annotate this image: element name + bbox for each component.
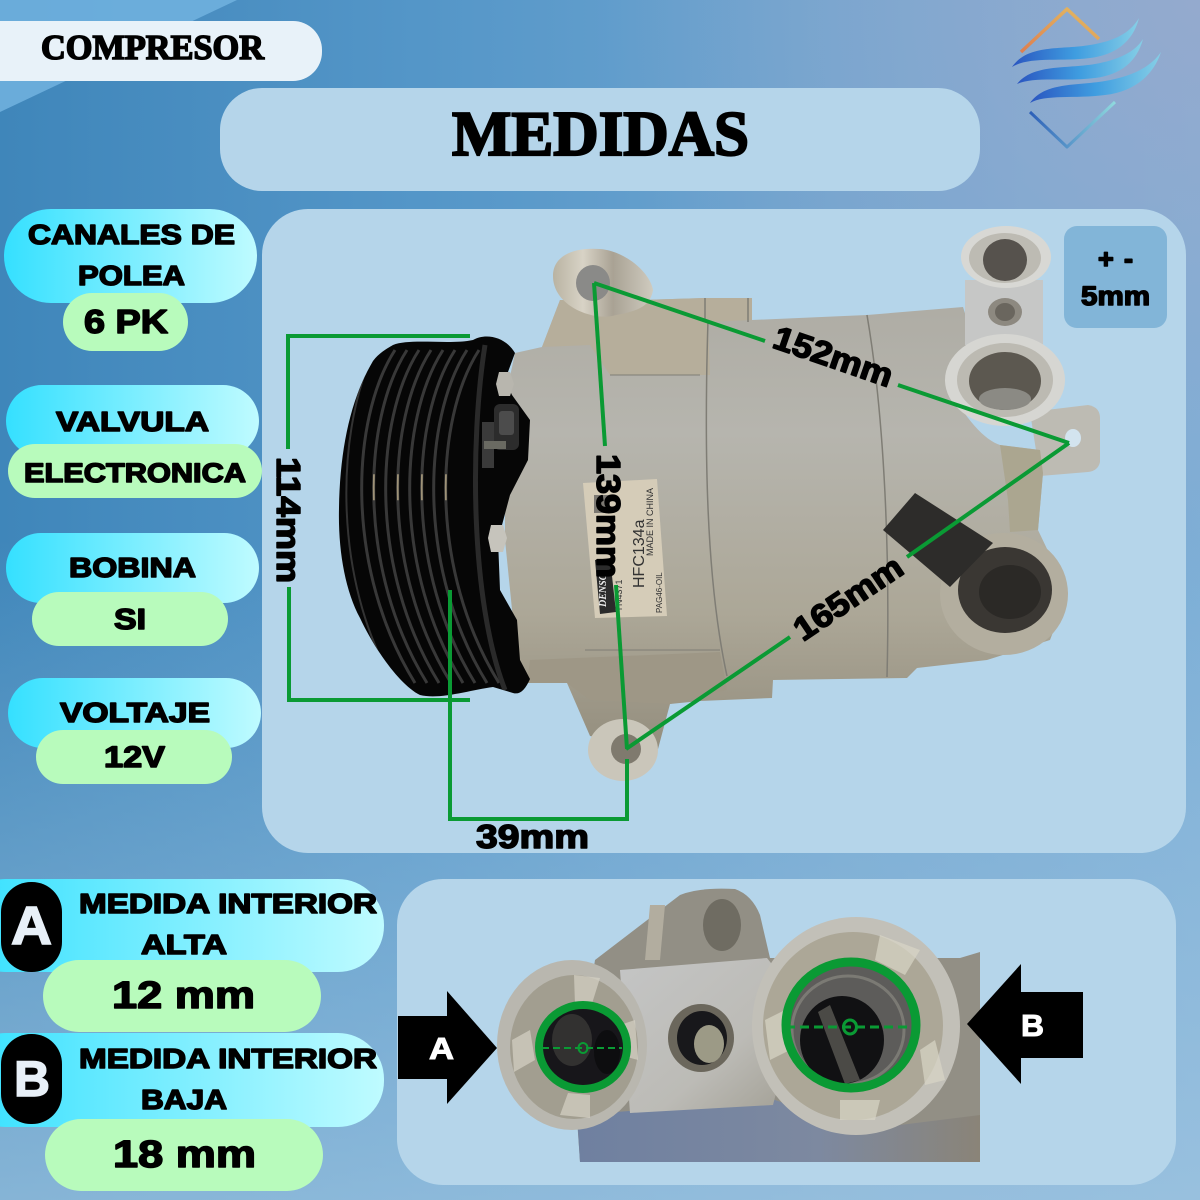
green rings <box>539 962 918 1089</box>
compressor illustration <box>339 226 1100 781</box>
measure A <box>0 879 384 1032</box>
measure A: MEDIDA INTERIOR <box>79 888 377 919</box>
dimension lines <box>288 283 1069 819</box>
spec: valvula electronica: ELECTRONICA <box>24 458 246 488</box>
spec: canales de polea: CANALES DE <box>28 219 235 250</box>
spec: canales de polea: POLEA <box>78 260 185 291</box>
clutch bolts and connector <box>482 372 519 552</box>
spec: voltaje: VOLTAJE <box>60 697 210 728</box>
center hole <box>668 1004 734 1072</box>
dimension: 165mm: 165mm <box>786 548 910 648</box>
measure B <box>0 1033 384 1191</box>
dimension: 139mm: 139mm <box>590 454 627 578</box>
spec: canales de polea <box>4 209 257 351</box>
spec: canales de polea: 6 PK <box>84 303 168 340</box>
dimension: 114mm: 114mm <box>270 457 307 583</box>
tolerance box <box>1064 226 1167 328</box>
title <box>220 88 980 191</box>
panel: main compressor <box>262 209 1186 853</box>
arrow A <box>398 991 497 1104</box>
housing shading <box>542 298 752 375</box>
product label: YN4371 <box>614 579 624 612</box>
arrow B <box>967 964 1083 1084</box>
measure A: ALTA <box>141 929 227 960</box>
panel: fittings detail <box>397 879 1176 1185</box>
fitting block <box>945 226 1081 447</box>
product label: PAG46-OIL <box>655 572 664 613</box>
sensor connector <box>883 493 1068 655</box>
dimension: 152mm: 152mm <box>769 319 898 394</box>
product label <box>583 479 667 618</box>
product label: HFC134a <box>631 519 648 588</box>
spec: voltaje <box>8 678 261 784</box>
right lug <box>1030 405 1100 476</box>
logo <box>1012 9 1161 147</box>
spec: bobina <box>6 533 259 646</box>
measure A: 12 mm <box>112 975 255 1017</box>
tolerance box: + - <box>1098 244 1133 274</box>
body seams <box>705 298 888 677</box>
fittings photo illustration <box>497 889 980 1162</box>
product label: MADE IN CHINA <box>645 488 655 556</box>
dimension: 39mm: 39mm <box>476 818 589 855</box>
arrow B: B <box>1021 1008 1044 1043</box>
compressor body <box>505 298 1068 749</box>
spec: bobina: SI <box>114 604 146 636</box>
measure B: BAJA <box>141 1084 227 1115</box>
arrow A: A <box>429 1031 454 1066</box>
badge: compresor: COMPRESOR <box>41 28 265 67</box>
spec: bobina: BOBINA <box>69 552 196 583</box>
title: MEDIDAS <box>452 98 749 169</box>
spec: valvula electronica <box>6 385 262 498</box>
tolerance box: 5mm <box>1081 281 1150 311</box>
measure A: A <box>11 896 52 956</box>
spec: valvula electronica: VALVULA <box>56 406 209 437</box>
left port <box>497 960 647 1130</box>
right port <box>752 917 960 1135</box>
measure B: B <box>14 1051 50 1107</box>
measure B: 18 mm <box>113 1134 256 1176</box>
measure B: MEDIDA INTERIOR <box>79 1043 377 1074</box>
badge: compresor <box>0 21 322 81</box>
bottom mounting lug <box>588 719 658 781</box>
pulley <box>339 336 530 696</box>
product label: DENSO <box>598 573 609 608</box>
top mounting lug <box>553 249 653 317</box>
spec: voltaje: 12V <box>104 741 165 774</box>
